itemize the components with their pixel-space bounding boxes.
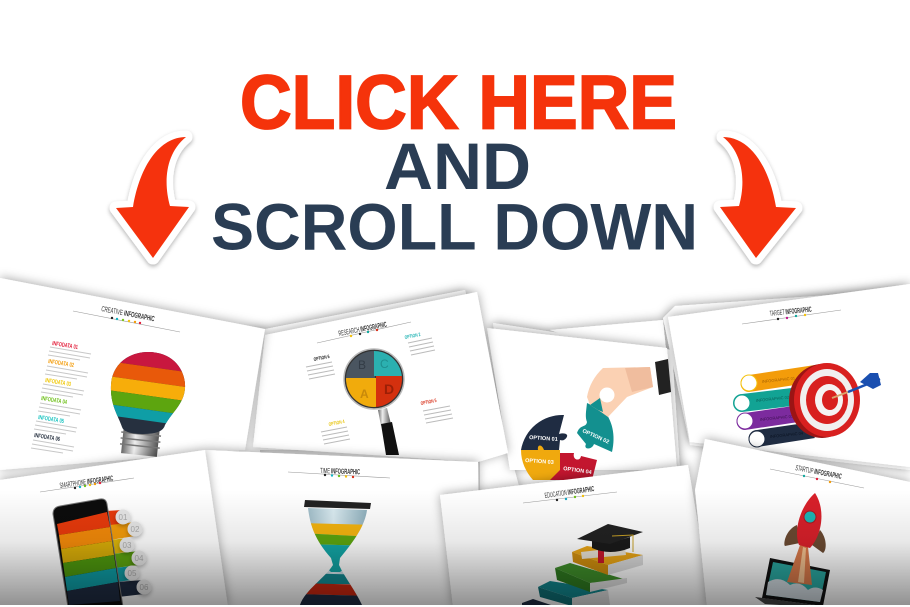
icon: magnifying glass	[343, 348, 405, 455]
chart: numbered tabs	[105, 510, 152, 597]
icon: puzzle circle: OPTION 01	[529, 435, 558, 443]
sheet: smartphone infographic	[0, 450, 228, 607]
heading: and: AND	[384, 130, 531, 203]
chart: numbered tabs: 02	[131, 525, 140, 534]
legend: infodata list: INFODATA 05	[38, 415, 65, 425]
icon: magnifying glass: B	[358, 358, 366, 372]
chart: numbered tabs: 03	[123, 541, 132, 550]
label: option 4	[321, 419, 350, 444]
legend: infodata list: INFODATA 02	[48, 359, 75, 369]
title: creative: CREATIVE INFOGRAPHIC	[101, 304, 156, 323]
sheet: time infographic	[205, 450, 480, 607]
title: creative	[73, 304, 180, 332]
icon: laptop	[755, 558, 830, 607]
icon: puzzle circle: OPTION 04	[563, 466, 593, 476]
chart: numbered tabs: 05	[128, 569, 137, 578]
sheet: creative infographic	[0, 278, 265, 470]
background paper stack	[232, 290, 910, 490]
legend: infodata list: INFODATA 06	[34, 433, 61, 443]
icon: dartboard	[789, 363, 860, 438]
chart: target bars	[733, 365, 815, 447]
icon: dart	[832, 373, 881, 398]
label: option 6	[306, 354, 335, 379]
icon: teal puzzle piece	[577, 403, 614, 452]
sheet: education infographic	[440, 465, 712, 607]
icon: hourglass	[300, 500, 371, 605]
label: option 4: OPTION 4	[328, 419, 345, 428]
label: option 5	[420, 398, 453, 423]
chart: target bars: INFOGRAPHIC 03	[760, 413, 794, 422]
sheet: research infographic	[253, 292, 508, 462]
arrow: left	[116, 137, 189, 258]
legend: infodata list	[31, 341, 91, 453]
title: time	[288, 466, 390, 478]
icon: puzzle circle: OPTION 03	[525, 458, 554, 466]
chart: numbered tabs: 01	[119, 513, 128, 522]
title: smartphone	[40, 474, 134, 492]
label: option 2	[404, 332, 435, 355]
icon: diploma and cap	[577, 524, 643, 563]
label: option 2: OPTION 2	[404, 332, 421, 341]
arrow: right	[720, 137, 796, 258]
title: target	[742, 305, 841, 324]
chart: target bars: INFOGRAPHIC 02	[756, 394, 790, 403]
sheet: startup infographic	[695, 439, 910, 607]
title: time: TIME INFOGRAPHIC	[320, 466, 361, 476]
legend: infodata list: INFODATA 03	[45, 378, 72, 388]
sheet: target infographic	[668, 284, 910, 467]
sheet: puzzle infographic	[487, 328, 677, 480]
icon: puzzle circle	[521, 415, 597, 480]
heading: scroll down: SCROLL DOWN	[211, 190, 698, 264]
icon: smartphone	[53, 499, 123, 607]
title: research	[317, 320, 411, 343]
chart: numbered tabs: 04	[135, 554, 144, 563]
title: startup: STARTUP INFOGRAPHIC	[795, 463, 843, 481]
title: smartphone: SMARTPHONE INFOGRAPHIC	[59, 474, 114, 490]
icon: hand with cuff	[587, 359, 671, 417]
icon: light bulb	[110, 352, 186, 457]
chart: numbered tabs: 06	[140, 583, 149, 592]
chart: target bars: INFOGRAPHIC 04	[770, 430, 804, 439]
chart: target bars: INFOGRAPHIC 01	[762, 375, 796, 384]
legend: infodata list: INFODATA 01	[52, 341, 79, 351]
title: education: EDUCATION INFOGRAPHIC	[544, 484, 595, 500]
icon: teal puzzle piece: OPTION 02	[581, 428, 610, 446]
legend: infodata list: INFODATA 04	[41, 396, 68, 406]
title: research: RESEARCH INFOGRAPHIC	[338, 320, 388, 338]
icon: magnifying glass: A	[360, 387, 369, 401]
label: option 5: OPTION 5	[420, 398, 437, 407]
icon: magnifying glass: D	[384, 381, 394, 397]
title: target: TARGET INFOGRAPHIC	[769, 305, 812, 318]
heading: click here: CLICK HERE	[240, 60, 677, 146]
label: option 6: OPTION 6	[313, 354, 330, 363]
icon: stacked books	[522, 546, 643, 607]
icon: magnifying glass: C	[380, 357, 389, 371]
title: startup	[770, 463, 864, 488]
bottom fade overlay	[0, 490, 910, 605]
icon: rocket	[784, 493, 826, 585]
title: education	[523, 484, 617, 503]
